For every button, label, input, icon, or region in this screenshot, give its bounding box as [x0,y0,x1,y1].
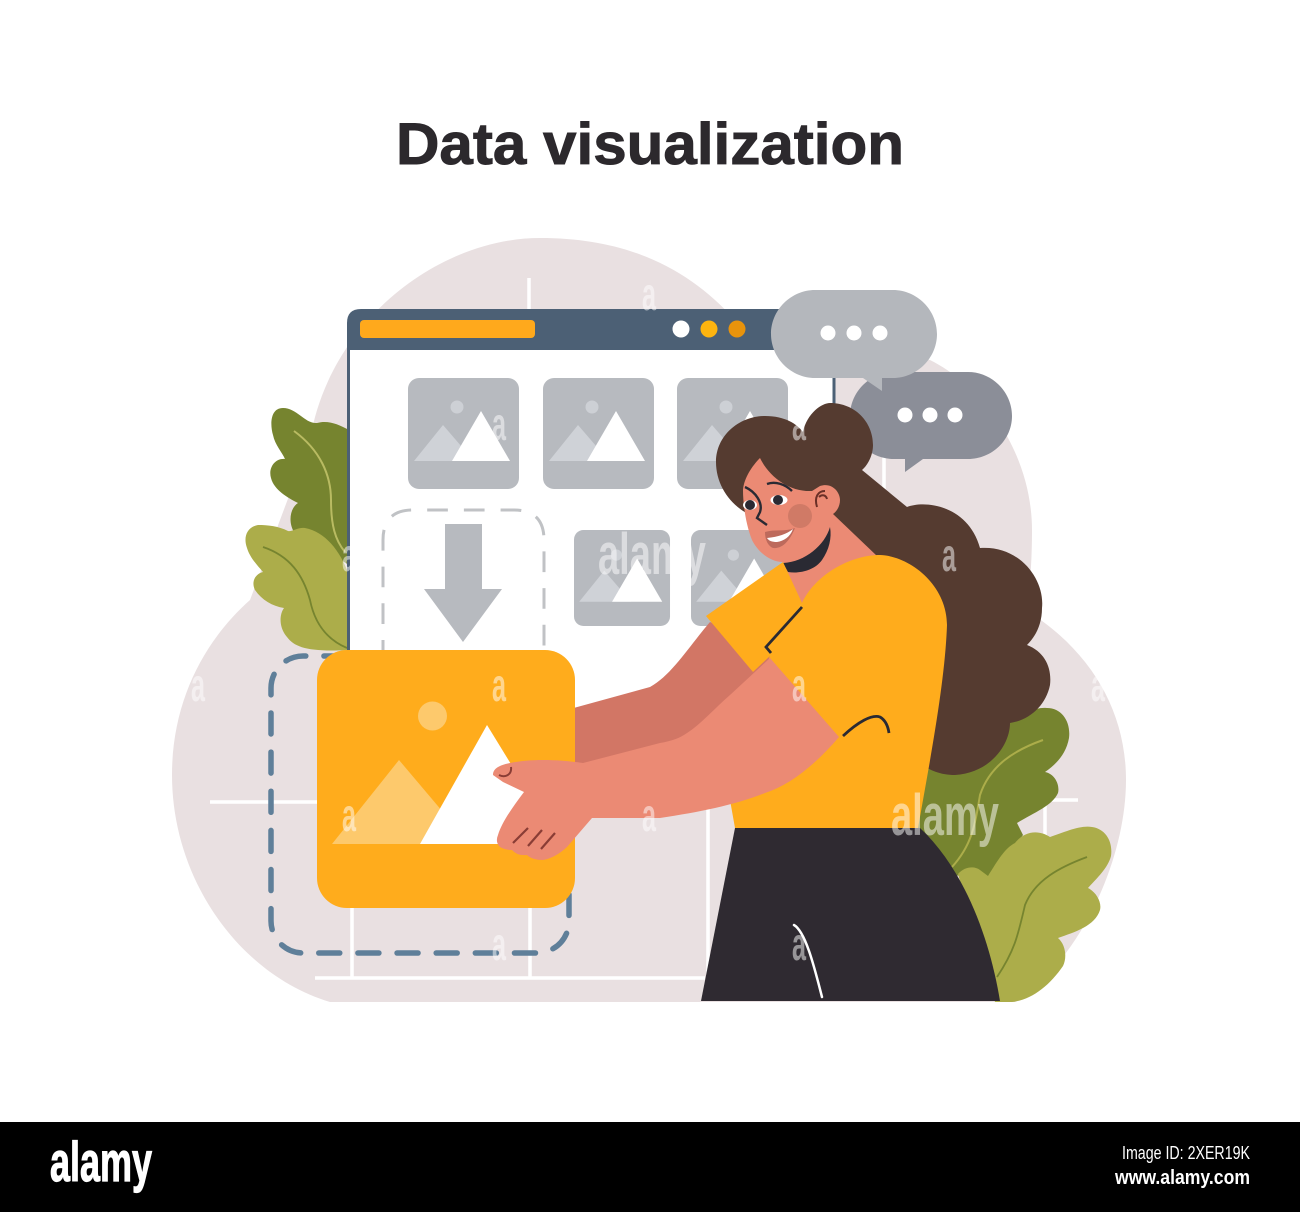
watermark marks: a [1091,659,1105,711]
window left border [347,340,350,650]
watermark marks: alamy [598,522,706,587]
image thumbnail 1 [408,378,519,489]
watermark marks: a [792,918,806,970]
footer logo: alamy [50,1130,152,1193]
image id: Image ID: 2XER19K [1122,1143,1250,1163]
far arm [570,622,775,768]
watermark marks: a [642,789,656,841]
dark leaf right [912,708,1069,878]
finger lines [513,828,555,849]
image card [317,650,575,908]
person [570,403,1050,1001]
browser window [347,309,834,760]
leaves left [245,408,349,650]
address bar [360,320,535,338]
arrow: down [424,524,502,642]
website: www.alamy.com [1114,1167,1250,1189]
image thumbnail 4 [574,530,670,626]
footer bar [0,1122,1300,1212]
watermark marks: a [342,789,356,841]
watermark marks: a [191,659,205,711]
choker [783,527,831,572]
window title bar [347,309,790,350]
blush [788,504,812,528]
speech bubble: light [771,290,937,391]
mouth [765,528,795,548]
speech bubble: dark [850,372,1012,472]
neck and face [743,458,877,610]
card sun [418,702,447,730]
window right border [832,350,836,410]
dashed drop zone [383,510,544,650]
near arm and hand [493,658,839,860]
thumb nail [499,767,511,776]
watermark marks: a [942,529,956,581]
ear line [816,491,827,507]
dark leaf vein [952,740,1043,867]
skirt fold line [794,925,822,997]
watermark marks: a [492,918,506,970]
image thumbnail 3 [677,378,788,489]
far sleeve [706,562,802,672]
leaves right [912,708,1111,1002]
shirt body [730,555,947,828]
shirt seam [766,607,802,653]
hair [716,403,1050,775]
background grid lines [210,278,1078,980]
blue dashed outline [271,656,569,953]
light leaf right [958,827,1111,1002]
watermark marks: alamy [891,783,999,848]
armpit line [843,716,889,736]
image thumbnail 2 [543,378,654,489]
watermark marks: a [342,529,356,581]
eyes and brows [743,483,792,525]
watermark marks: a [792,659,806,711]
image thumbnail 5 [691,530,787,626]
watermark marks: a [792,398,806,450]
card front mountain [420,725,560,844]
window body [348,330,834,760]
dark leaf left [270,408,349,565]
title: Data visualization [396,112,904,177]
watermark marks: a [492,398,506,450]
watermark marks [191,268,1105,970]
watermark marks: a [642,268,656,320]
card back mountain [332,760,470,844]
light leaf vein [997,857,1087,977]
watermark marks: a [492,659,506,711]
background blob [172,238,1126,1002]
dark leaf vein [294,431,345,552]
skirt [701,828,1000,1001]
window buttons [672,320,746,338]
light leaf vein [263,547,347,648]
light leaf left [245,525,349,650]
